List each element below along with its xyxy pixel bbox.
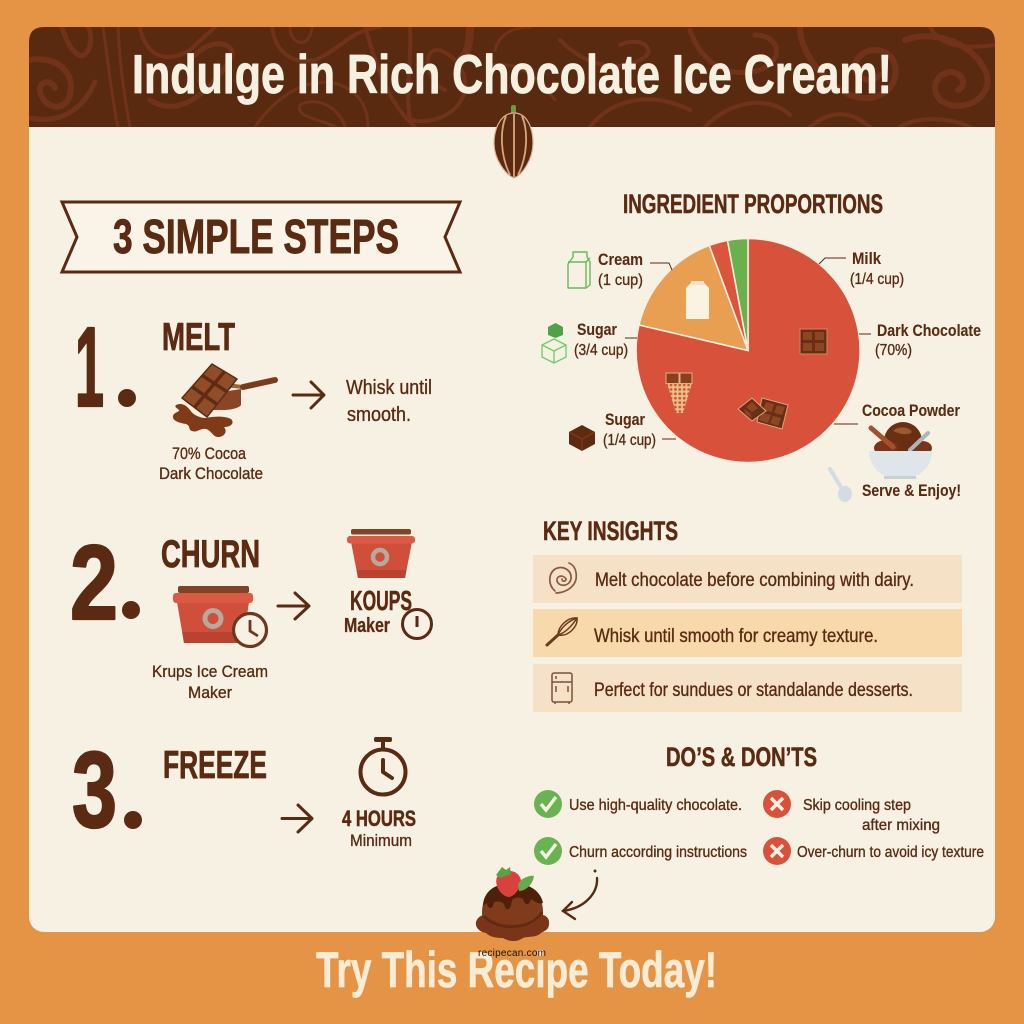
do: churn according instructions xyxy=(534,837,747,865)
icon: fridge xyxy=(552,673,572,704)
icon: ice cream bowl xyxy=(869,422,932,479)
label: cocoa powder: Cocoa Powder xyxy=(862,401,960,420)
label: sugar 3/4 cup: Sugar xyxy=(577,320,617,339)
number 1: 1 xyxy=(75,304,104,430)
caption: krups ice cream maker: Maker xyxy=(188,683,232,702)
label: cream: (1 cup) xyxy=(598,272,643,289)
icon: chocolate bar melting in saucepan xyxy=(173,364,275,437)
heading: key insights: KEY INSIGHTS xyxy=(543,516,678,546)
caption: krups ice cream maker xyxy=(152,662,268,702)
label: koups maker: KOUPS xyxy=(350,585,412,616)
slice: cream xyxy=(639,245,748,350)
label: sugar 3/4 cup: (3/4 cup) xyxy=(574,342,628,359)
note: whisk until smooth: Whisk until xyxy=(346,377,432,399)
icon: brown sugar cube xyxy=(569,425,595,451)
step 1: melt xyxy=(75,304,432,483)
arrow xyxy=(282,805,312,832)
heading: do's and don'ts: DO’S & DON’TS xyxy=(666,742,817,772)
heading: ingredient proportions: INGREDIENT PROPORTIONS xyxy=(623,189,883,219)
watermark: recipecan.com: recipecan.com xyxy=(478,948,546,959)
icon: ice cream maker xyxy=(347,529,415,578)
do: high-quality chocolate xyxy=(534,790,742,818)
icon: ice cream maker with clock xyxy=(173,586,266,646)
icon: spoon xyxy=(830,469,852,502)
caption: 70% cocoa dark chocolate: 70% Cocoa xyxy=(172,444,246,463)
icon: waffle cone in slice xyxy=(666,373,692,413)
arrow xyxy=(278,593,309,619)
arrow xyxy=(293,382,324,408)
slice: milk xyxy=(728,238,748,350)
label: sugar 1/4 cup xyxy=(569,410,676,451)
heading: churn: CHURN xyxy=(161,533,260,576)
insight row 2 xyxy=(533,609,962,657)
banner: 3 simple steps: 3 SIMPLE STEPS xyxy=(113,211,399,264)
label: dark chocolate xyxy=(859,321,981,359)
caption: 70% cocoa dark chocolate xyxy=(159,444,263,483)
label: milk: Milk xyxy=(852,249,881,268)
label: cocoa powder xyxy=(834,401,960,424)
banner: 3 simple steps xyxy=(62,202,460,272)
note: whisk until smooth xyxy=(346,377,432,426)
icon: chocolate pieces in slice xyxy=(738,398,788,429)
don't: over-churn xyxy=(763,837,984,865)
insight row 2: Whisk until smooth for creamy texture. xyxy=(594,626,878,647)
label: cream xyxy=(568,250,672,289)
icon: cocoa pod xyxy=(494,105,533,178)
panel: key insights xyxy=(533,516,962,712)
icon: green carton outline xyxy=(568,252,590,288)
step 2: churn xyxy=(70,524,432,702)
number 2: 2 xyxy=(70,524,118,642)
don't: over-churn: Over-churn to avoid icy texture xyxy=(797,844,984,861)
note: whisk until smooth: smooth. xyxy=(347,404,411,426)
label: cream: Cream xyxy=(598,250,643,269)
header band xyxy=(29,27,995,127)
label: sugar 1/4 cup: (1/4 cup) xyxy=(603,432,656,449)
icon: clock xyxy=(402,610,432,638)
label: 4 hours minimum: 4 HOURS xyxy=(342,806,416,831)
do: churn according instructions: Churn according instructions xyxy=(569,844,747,861)
label: serve and enjoy: Serve & Enjoy! xyxy=(862,481,961,500)
slice: dark chocolate xyxy=(636,238,860,462)
label: sugar 3/4 cup xyxy=(542,320,637,363)
label: dark chocolate: (70%) xyxy=(875,342,912,359)
slice: sugar xyxy=(709,240,748,350)
number 3: 3 xyxy=(72,729,117,850)
heading: melt: MELT xyxy=(162,316,235,359)
label: sugar 1/4 cup: Sugar xyxy=(605,410,645,429)
icon: chocolate squares in slice xyxy=(800,329,827,354)
panel: do's and don'ts xyxy=(534,742,984,865)
step 3: freeze xyxy=(72,729,416,850)
label: milk: (1/4 cup) xyxy=(850,271,904,288)
don't: skip cooling step: after mixing xyxy=(862,817,940,834)
do: high-quality chocolate: Use high-quality chocolate. xyxy=(569,797,742,814)
icon: whisk xyxy=(547,618,577,645)
icon: swirl xyxy=(550,563,576,593)
insight row 3: Perfect for sundues or standalande desserts. xyxy=(594,680,913,701)
icon: stopwatch xyxy=(360,737,406,794)
label: 4 hours minimum xyxy=(342,806,416,850)
label: 4 hours minimum: Minimum xyxy=(350,831,412,850)
label: koups maker: Maker xyxy=(344,615,390,637)
insight row 1 xyxy=(533,555,962,603)
arrow: curved to ice cream xyxy=(563,870,597,919)
footer call to action: Try This Recipe Today! xyxy=(316,942,717,998)
caption: krups ice cream maker: Krups Ice Cream xyxy=(152,662,268,681)
icon: milk carton in slice xyxy=(686,281,709,319)
heading: freeze: FREEZE xyxy=(163,744,267,787)
don't: skip cooling step xyxy=(763,790,940,834)
insight row 1: Melt chocolate before combining with dairy. xyxy=(595,570,914,591)
label: milk xyxy=(819,249,904,288)
pie chart: ingredient proportions xyxy=(636,238,860,462)
caption: 70% cocoa dark chocolate: Dark Chocolate xyxy=(159,464,263,483)
label: koups maker xyxy=(344,585,412,637)
icon: chocolate ice cream scoop with strawberry xyxy=(476,867,549,941)
insight row 3 xyxy=(533,664,962,712)
label: dark chocolate: Dark Chocolate xyxy=(877,321,981,340)
icon: green sugar cubes xyxy=(548,323,563,338)
don't: skip cooling step: Skip cooling step xyxy=(803,797,911,814)
